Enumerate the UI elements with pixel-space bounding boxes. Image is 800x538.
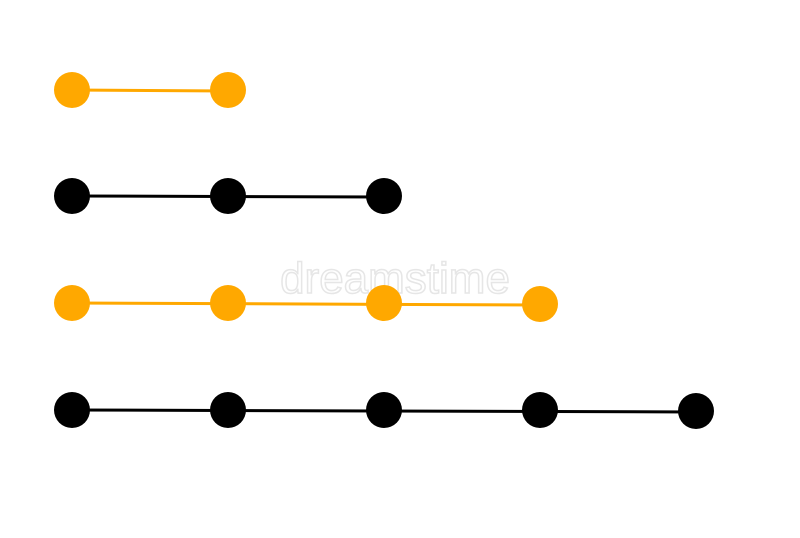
row 3: orange four dots — [54, 285, 558, 322]
row 1: orange two dots — [54, 72, 246, 108]
row 4: black five dots — [54, 392, 714, 429]
row 2: black three dots — [54, 178, 402, 214]
watermark text: dreamstime — [280, 254, 510, 303]
